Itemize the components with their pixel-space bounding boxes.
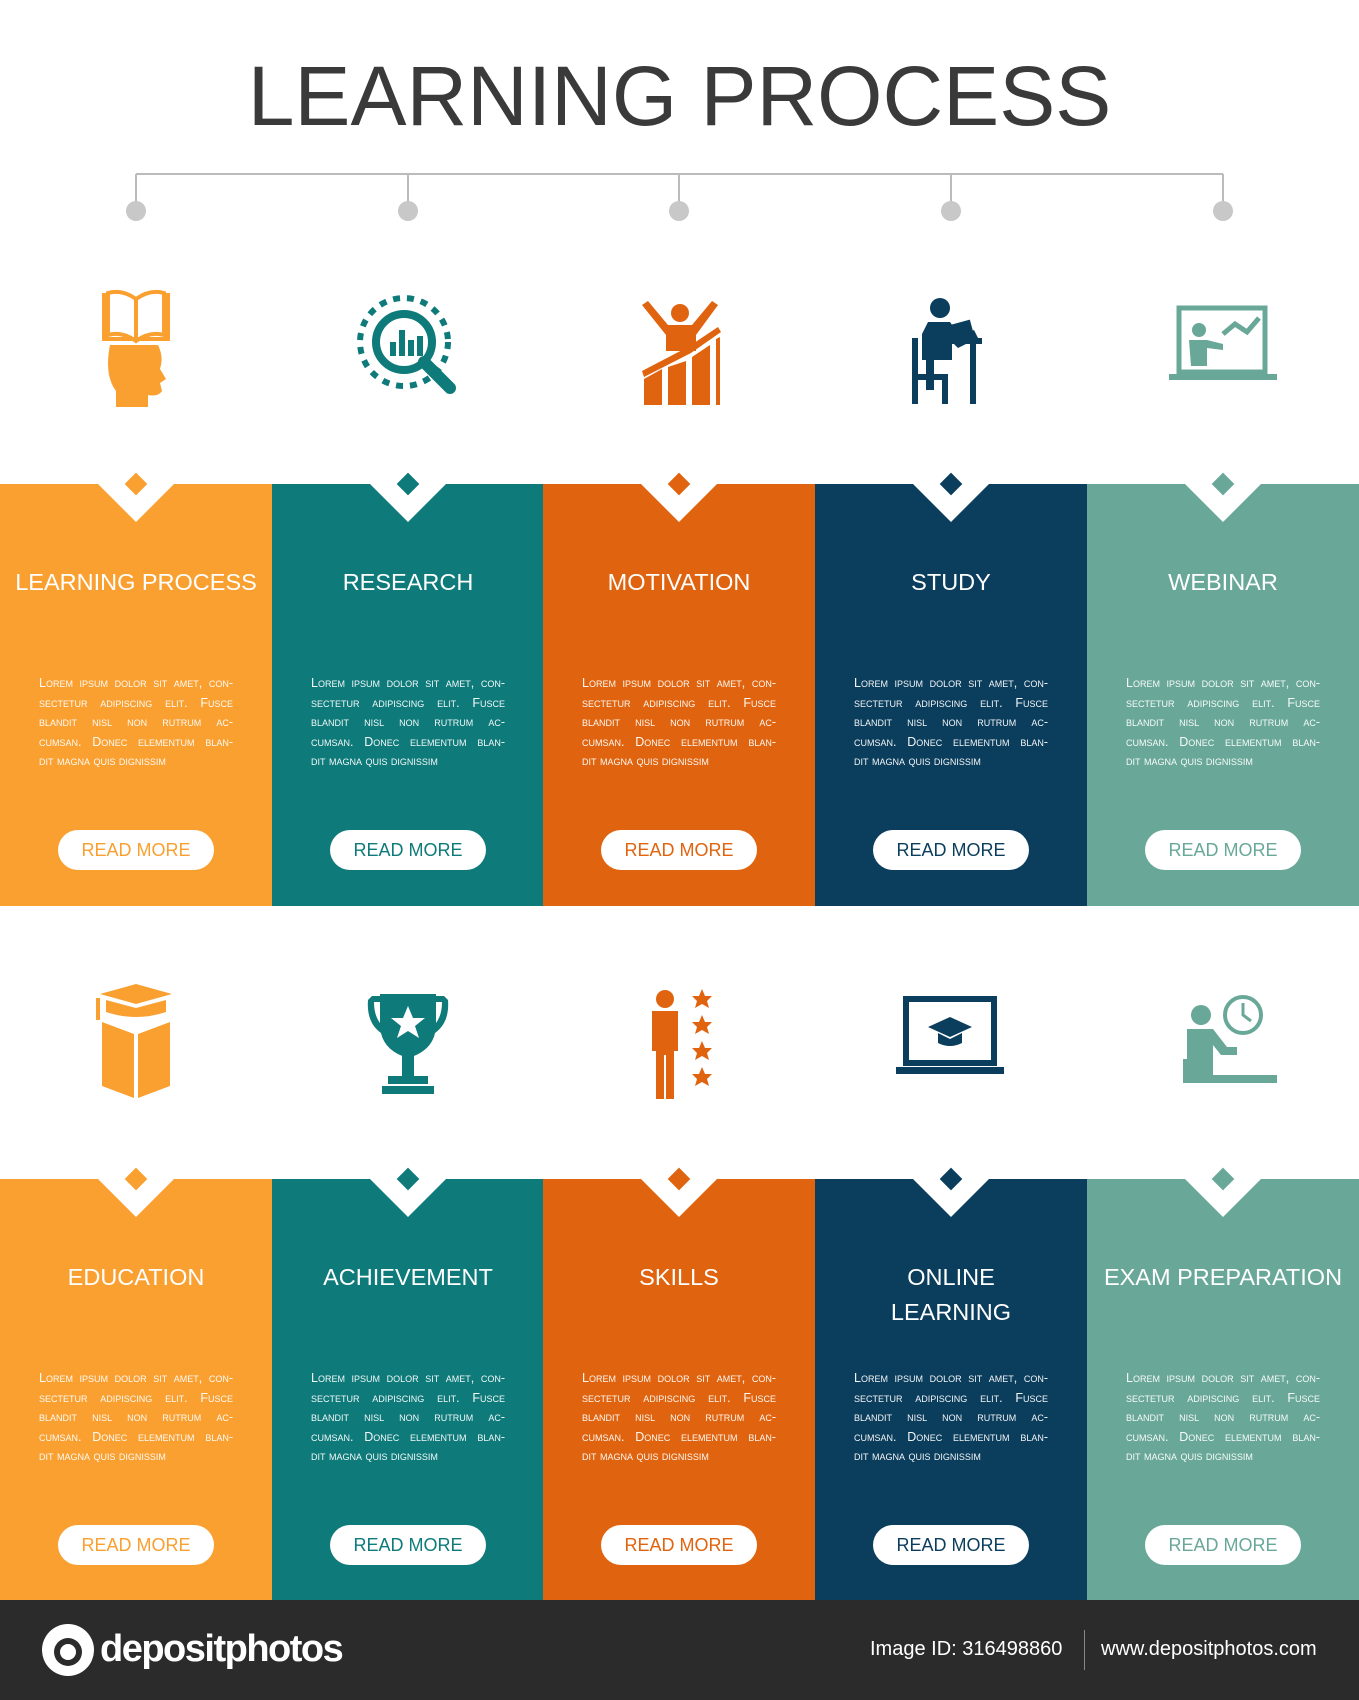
panel: education: EDUCATION (68, 1264, 204, 1290)
panel: online learning: cumsan. Donec elementum blan- (854, 1430, 1048, 1444)
panel: skills: blandit nisl non rutrum ac- (582, 1410, 776, 1424)
panel: online learning: ONLINE (907, 1264, 995, 1290)
footer url: www.depositphotos.com (1101, 1638, 1317, 1660)
panel: study: READ MORE (896, 840, 1006, 860)
panel: learning process: blandit nisl non rutrum ac- (39, 715, 233, 729)
panel: webinar: READ MORE (1168, 840, 1278, 860)
panel: research: dit magna quis dignissim (311, 754, 438, 768)
panel: webinar: blandit nisl non rutrum ac- (1126, 715, 1320, 729)
panel: motivation: dit magna quis dignissim (582, 754, 709, 768)
icon: online learning laptop (896, 996, 1004, 1074)
panel: skills: SKILLS (639, 1264, 719, 1290)
title: LEARNING PROCESS (248, 49, 1111, 143)
panel: online learning (815, 1179, 1087, 1601)
panel: education (0, 1179, 272, 1601)
panel: study: sectetur adipiscing elit. Fusce (854, 696, 1048, 710)
panel: webinar (1087, 484, 1359, 906)
panel: study: blandit nisl non rutrum ac- (854, 715, 1048, 729)
icon: education box (96, 984, 172, 1098)
icon: trophy (368, 994, 448, 1094)
panel: skills: dit magna quis dignissim (582, 1449, 709, 1463)
panel: achievement: cumsan. Donec elementum blan- (311, 1430, 505, 1444)
panel: exam preparation: Lorem ipsum dolor sit amet, con- (1126, 1371, 1320, 1385)
panel: research: blandit nisl non rutrum ac- (311, 715, 505, 729)
panel: research: sectetur adipiscing elit. Fusce (311, 696, 505, 710)
panel: motivation: Lorem ipsum dolor sit amet, con- (582, 676, 776, 690)
panel: exam preparation: EXAM PREPARATION (1104, 1264, 1342, 1290)
icon: exam preparation (1183, 995, 1277, 1083)
panel: motivation: blandit nisl non rutrum ac- (582, 715, 776, 729)
panel: exam preparation: blandit nisl non rutrum ac- (1126, 1410, 1320, 1424)
panel: study: STUDY (911, 569, 991, 595)
icon: skills (652, 989, 712, 1099)
panel: research: Lorem ipsum dolor sit amet, con- (311, 676, 505, 690)
panel: education: sectetur adipiscing elit. Fusce (39, 1391, 233, 1405)
panel: motivation: READ MORE (624, 840, 734, 860)
icon: research magnifier (357, 295, 456, 394)
panel: motivation: cumsan. Donec elementum blan- (582, 735, 776, 749)
panel: education: cumsan. Donec elementum blan- (39, 1430, 233, 1444)
panel: skills: READ MORE (624, 1535, 734, 1555)
panel: achievement: READ MORE (353, 1535, 462, 1555)
panel: research: READ MORE (353, 840, 462, 860)
panel: skills: sectetur adipiscing elit. Fusce (582, 1391, 776, 1405)
panel: online learning: dit magna quis dignissim (854, 1449, 981, 1463)
panel: education: blandit nisl non rutrum ac- (39, 1410, 233, 1424)
panel: motivation: sectetur adipiscing elit. Fusce (582, 696, 776, 710)
panel: learning process: LEARNING PROCESS (15, 569, 257, 595)
panel: online learning: blandit nisl non rutrum ac- (854, 1410, 1048, 1424)
panel: education: Lorem ipsum dolor sit amet, con- (39, 1371, 233, 1385)
panel: learning process: dit magna quis dignissim (39, 754, 166, 768)
panel: online learning: sectetur adipiscing elit. Fusce (854, 1391, 1048, 1405)
panel: skills: Lorem ipsum dolor sit amet, con- (582, 1371, 776, 1385)
panel: education: READ MORE (81, 1535, 190, 1555)
footer logo (42, 1624, 342, 1676)
panel: research (272, 484, 544, 906)
panel: online learning: Lorem ipsum dolor sit amet, con- (854, 1371, 1048, 1385)
panel: achievement: dit magna quis dignissim (311, 1449, 438, 1463)
panel: learning process (0, 484, 272, 906)
footer logo: depositphotos (100, 1628, 342, 1670)
panel: achievement: Lorem ipsum dolor sit amet, con- (311, 1371, 505, 1385)
panel: skills: cumsan. Donec elementum blan- (582, 1430, 776, 1444)
panel: research: RESEARCH (343, 569, 473, 595)
panel: study: cumsan. Donec elementum blan- (854, 735, 1048, 749)
icon: study (912, 298, 982, 404)
panel: webinar: cumsan. Donec elementum blan- (1126, 735, 1320, 749)
footer image id: Image ID: 316498860 (870, 1638, 1062, 1660)
panel: achievement: ACHIEVEMENT (323, 1264, 493, 1290)
icon: motivation (642, 301, 721, 405)
panel: research: cumsan. Donec elementum blan- (311, 735, 505, 749)
panel: exam preparation: READ MORE (1168, 1535, 1278, 1555)
panel: achievement: sectetur adipiscing elit. Fusce (311, 1391, 505, 1405)
panel: webinar: Lorem ipsum dolor sit amet, con- (1126, 676, 1320, 690)
panel: online learning: LEARNING (891, 1299, 1011, 1325)
icon: head with book (102, 290, 170, 407)
panel: motivation: MOTIVATION (608, 569, 750, 595)
panel: webinar: dit magna quis dignissim (1126, 754, 1253, 768)
panel: study: Lorem ipsum dolor sit amet, con- (854, 676, 1048, 690)
panel: exam preparation: dit magna quis dignissim (1126, 1449, 1253, 1463)
panel: achievement (272, 1179, 544, 1601)
panel: study (815, 484, 1087, 906)
icon: webinar (1169, 306, 1277, 380)
panel: skills (543, 1179, 815, 1601)
panel: online learning: READ MORE (896, 1535, 1006, 1555)
connector lines (126, 173, 1233, 221)
panel: learning process: sectetur adipiscing elit. Fusce (39, 696, 233, 710)
panel: achievement: blandit nisl non rutrum ac- (311, 1410, 505, 1424)
panel: learning process: cumsan. Donec elementum blan- (39, 735, 233, 749)
panel: webinar: WEBINAR (1168, 569, 1278, 595)
panel: exam preparation: cumsan. Donec elementum blan- (1126, 1430, 1320, 1444)
footer (0, 1600, 1359, 1700)
panel: learning process: READ MORE (81, 840, 190, 860)
panel: motivation (543, 484, 815, 906)
panel: exam preparation (1087, 1179, 1359, 1601)
panel: learning process: Lorem ipsum dolor sit amet, con- (39, 676, 233, 690)
panel: study: dit magna quis dignissim (854, 754, 981, 768)
panel: education: dit magna quis dignissim (39, 1449, 166, 1463)
panel: exam preparation: sectetur adipiscing elit. Fusce (1126, 1391, 1320, 1405)
panel: webinar: sectetur adipiscing elit. Fusce (1126, 696, 1320, 710)
